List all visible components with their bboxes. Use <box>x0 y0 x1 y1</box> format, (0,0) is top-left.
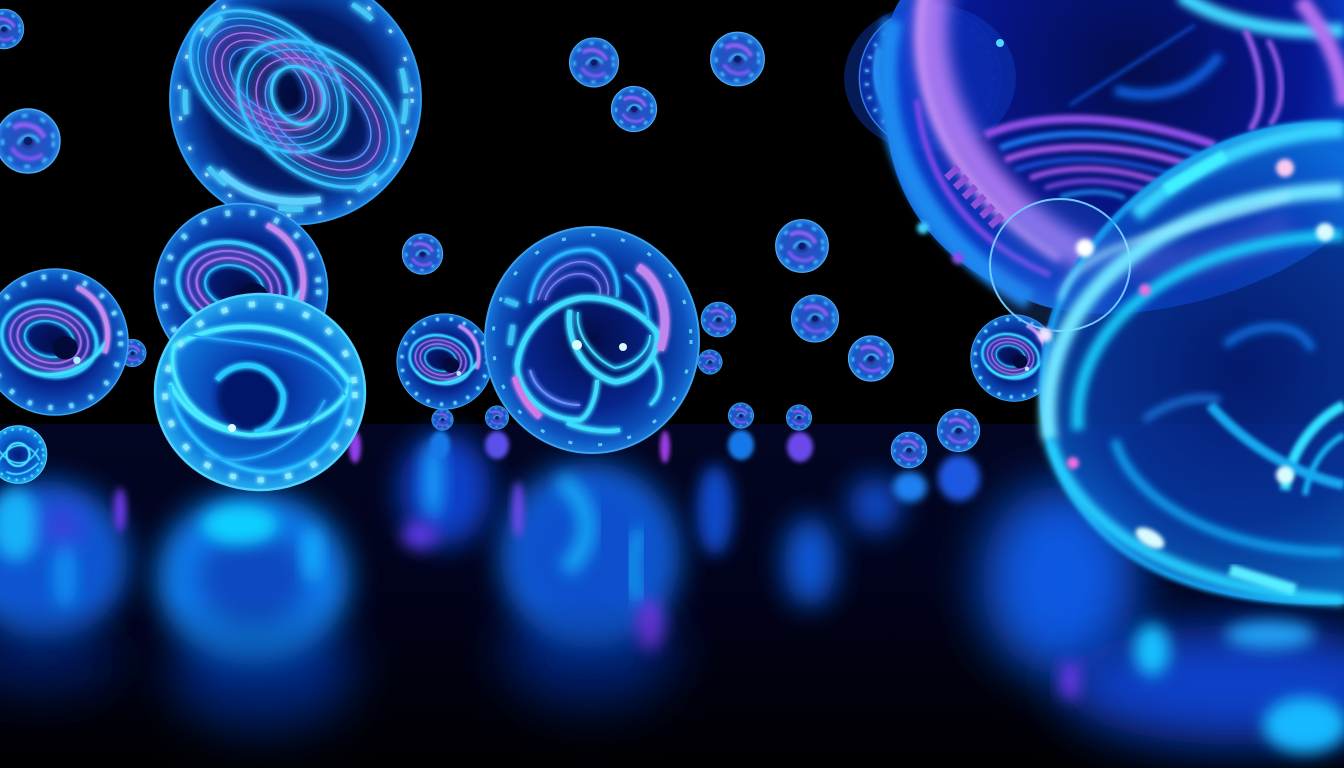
bubble <box>402 234 443 274</box>
small bubbles <box>0 9 980 468</box>
orb: bright cyan front <box>155 294 365 490</box>
orb: far left <box>0 269 128 415</box>
orb: behind right <box>859 7 1001 149</box>
reflection: huge orbs <box>982 485 1138 675</box>
band lower <box>1050 440 1344 600</box>
bubble <box>611 86 657 132</box>
bubble <box>776 220 828 272</box>
bubble <box>937 409 980 452</box>
bubble <box>432 409 453 430</box>
reflection: medium orb <box>399 434 491 546</box>
bubble <box>0 109 60 173</box>
bright swirl upper <box>1048 190 1344 440</box>
bubble <box>485 406 509 429</box>
floor <box>0 424 1344 768</box>
stripe rings <box>985 119 1215 198</box>
orb: bottom left small <box>0 426 47 483</box>
bubble <box>701 302 736 337</box>
bubble <box>570 38 618 87</box>
lavender broad band <box>931 0 1290 264</box>
bubble <box>711 32 764 86</box>
reflection: centre orb <box>505 595 675 715</box>
small translucent bubble <box>990 199 1130 331</box>
reflection: bright orb ring <box>175 510 331 646</box>
orb: top large <box>163 0 426 224</box>
floor fade <box>0 424 1344 768</box>
floor reflections <box>0 424 1344 768</box>
faint inner strokes <box>1115 55 1220 94</box>
reflection: small bubbles <box>697 465 733 555</box>
bubble <box>0 9 24 49</box>
orb: mid right partially hidden <box>971 315 1057 401</box>
stripes left of ring <box>950 170 1000 225</box>
orb: medium centre left <box>397 314 492 409</box>
bubble <box>848 336 894 381</box>
orb: left middle <box>154 203 328 377</box>
bubble <box>119 339 146 367</box>
bubble <box>728 403 754 428</box>
reflection: deep glow under bright orb <box>172 610 352 740</box>
bubble <box>698 350 722 374</box>
bubble <box>786 405 812 430</box>
bubble <box>891 432 927 468</box>
upper right arcs <box>1180 0 1344 31</box>
reflection: far left orb <box>0 620 120 700</box>
mid bubble seen through rear orb <box>844 4 1016 152</box>
orb: centre <box>485 227 699 453</box>
light sparks <box>1132 523 1168 553</box>
bubble <box>791 295 839 342</box>
rim <box>1043 124 1344 601</box>
orb: huge rear right <box>844 0 1344 314</box>
outer blue rim <box>886 20 1030 300</box>
inner swirls <box>1285 405 1344 490</box>
orb: huge front right <box>990 122 1344 605</box>
